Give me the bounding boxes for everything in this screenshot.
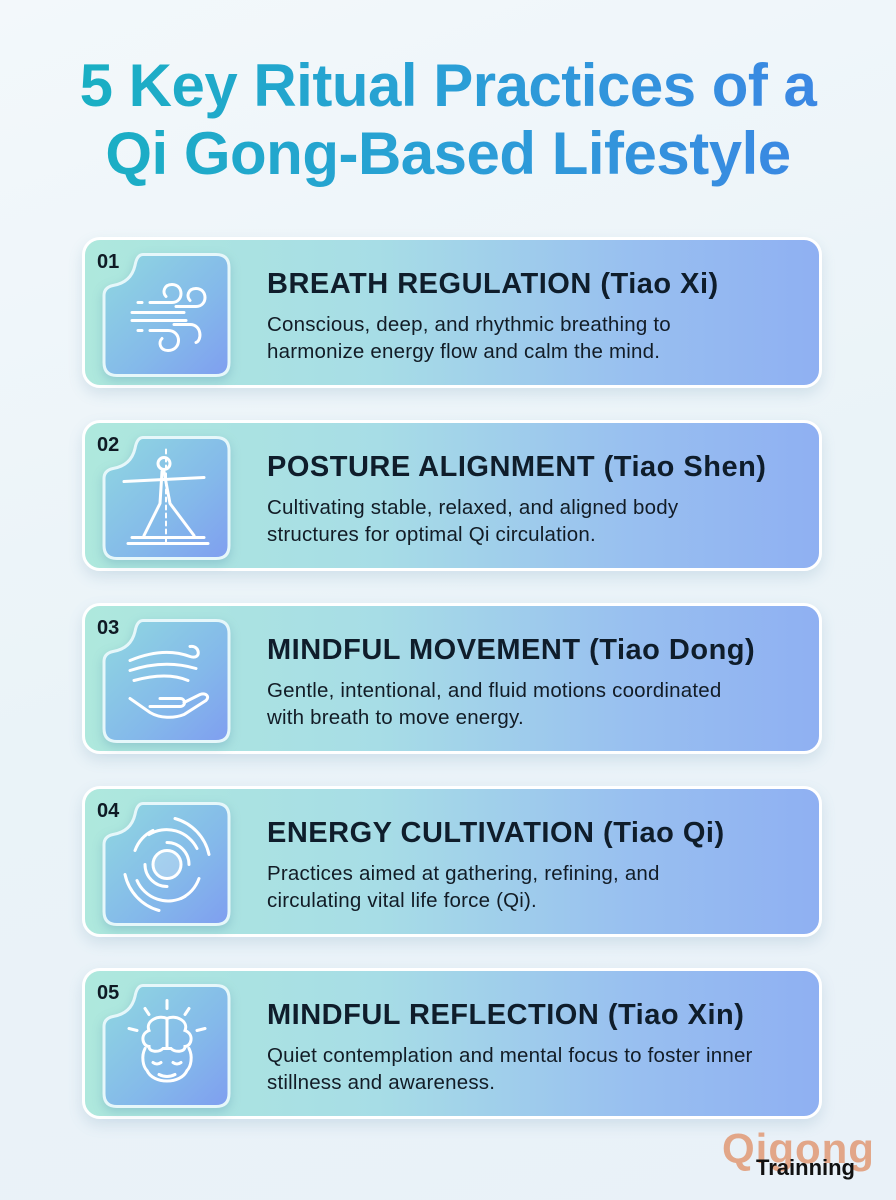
- heading: ENERGY CULTIVATION (Tiao Qi): [267, 817, 725, 849]
- heading: MINDFUL MOVEMENT (Tiao Dong): [267, 634, 755, 666]
- panel: card 03 mindful movement: [82, 603, 822, 754]
- number 04: 04: [97, 800, 119, 822]
- number 03: 03: [97, 617, 119, 639]
- description: Gentle, intentional, and fluid motions coordinated with breath to move energy.: [267, 679, 721, 729]
- heading: BREATH REGULATION (Tiao Xi): [267, 268, 719, 300]
- number 01: 01: [97, 251, 119, 273]
- description: Practices aimed at gathering, refining, and circulating vital life force (Qi).: [267, 862, 660, 912]
- title: Qi Gong-Based Lifestyle: [105, 120, 791, 187]
- description: Cultivating stable, relaxed, and aligned body structures for optimal Qi circulation.: [267, 496, 678, 546]
- panel: card 02 posture alignment: [82, 420, 822, 571]
- number 05: 05: [97, 982, 119, 1004]
- icon: energy spiral: [100, 802, 234, 935]
- logo: Qigong Training: Trainning: [756, 1155, 855, 1180]
- number 02: 02: [97, 434, 119, 456]
- description: Conscious, deep, and rhythmic breathing to harmonize energy flow and calm the mind.: [267, 313, 671, 363]
- title: 5 Key Ritual Practices of a: [80, 52, 816, 119]
- icon: wind breath: [100, 253, 234, 386]
- logo: Qigong Training: Qigong: [722, 1125, 875, 1172]
- description: Quiet contemplation and mental focus to foster inner stillness and awareness.: [267, 1044, 753, 1094]
- heading: POSTURE ALIGNMENT (Tiao Shen): [267, 451, 766, 483]
- panel: card 05 mindful reflection: [82, 968, 822, 1119]
- title: [0, 52, 896, 188]
- icon: hand with wind: [100, 619, 234, 752]
- panel: card 04 energy cultivation: [82, 786, 822, 937]
- panel: card 01 breath regulation: [82, 237, 822, 388]
- icon: head with brain: [100, 984, 234, 1117]
- icon: posture figure: [100, 436, 234, 569]
- heading: MINDFUL REFLECTION (Tiao Xin): [267, 999, 744, 1031]
